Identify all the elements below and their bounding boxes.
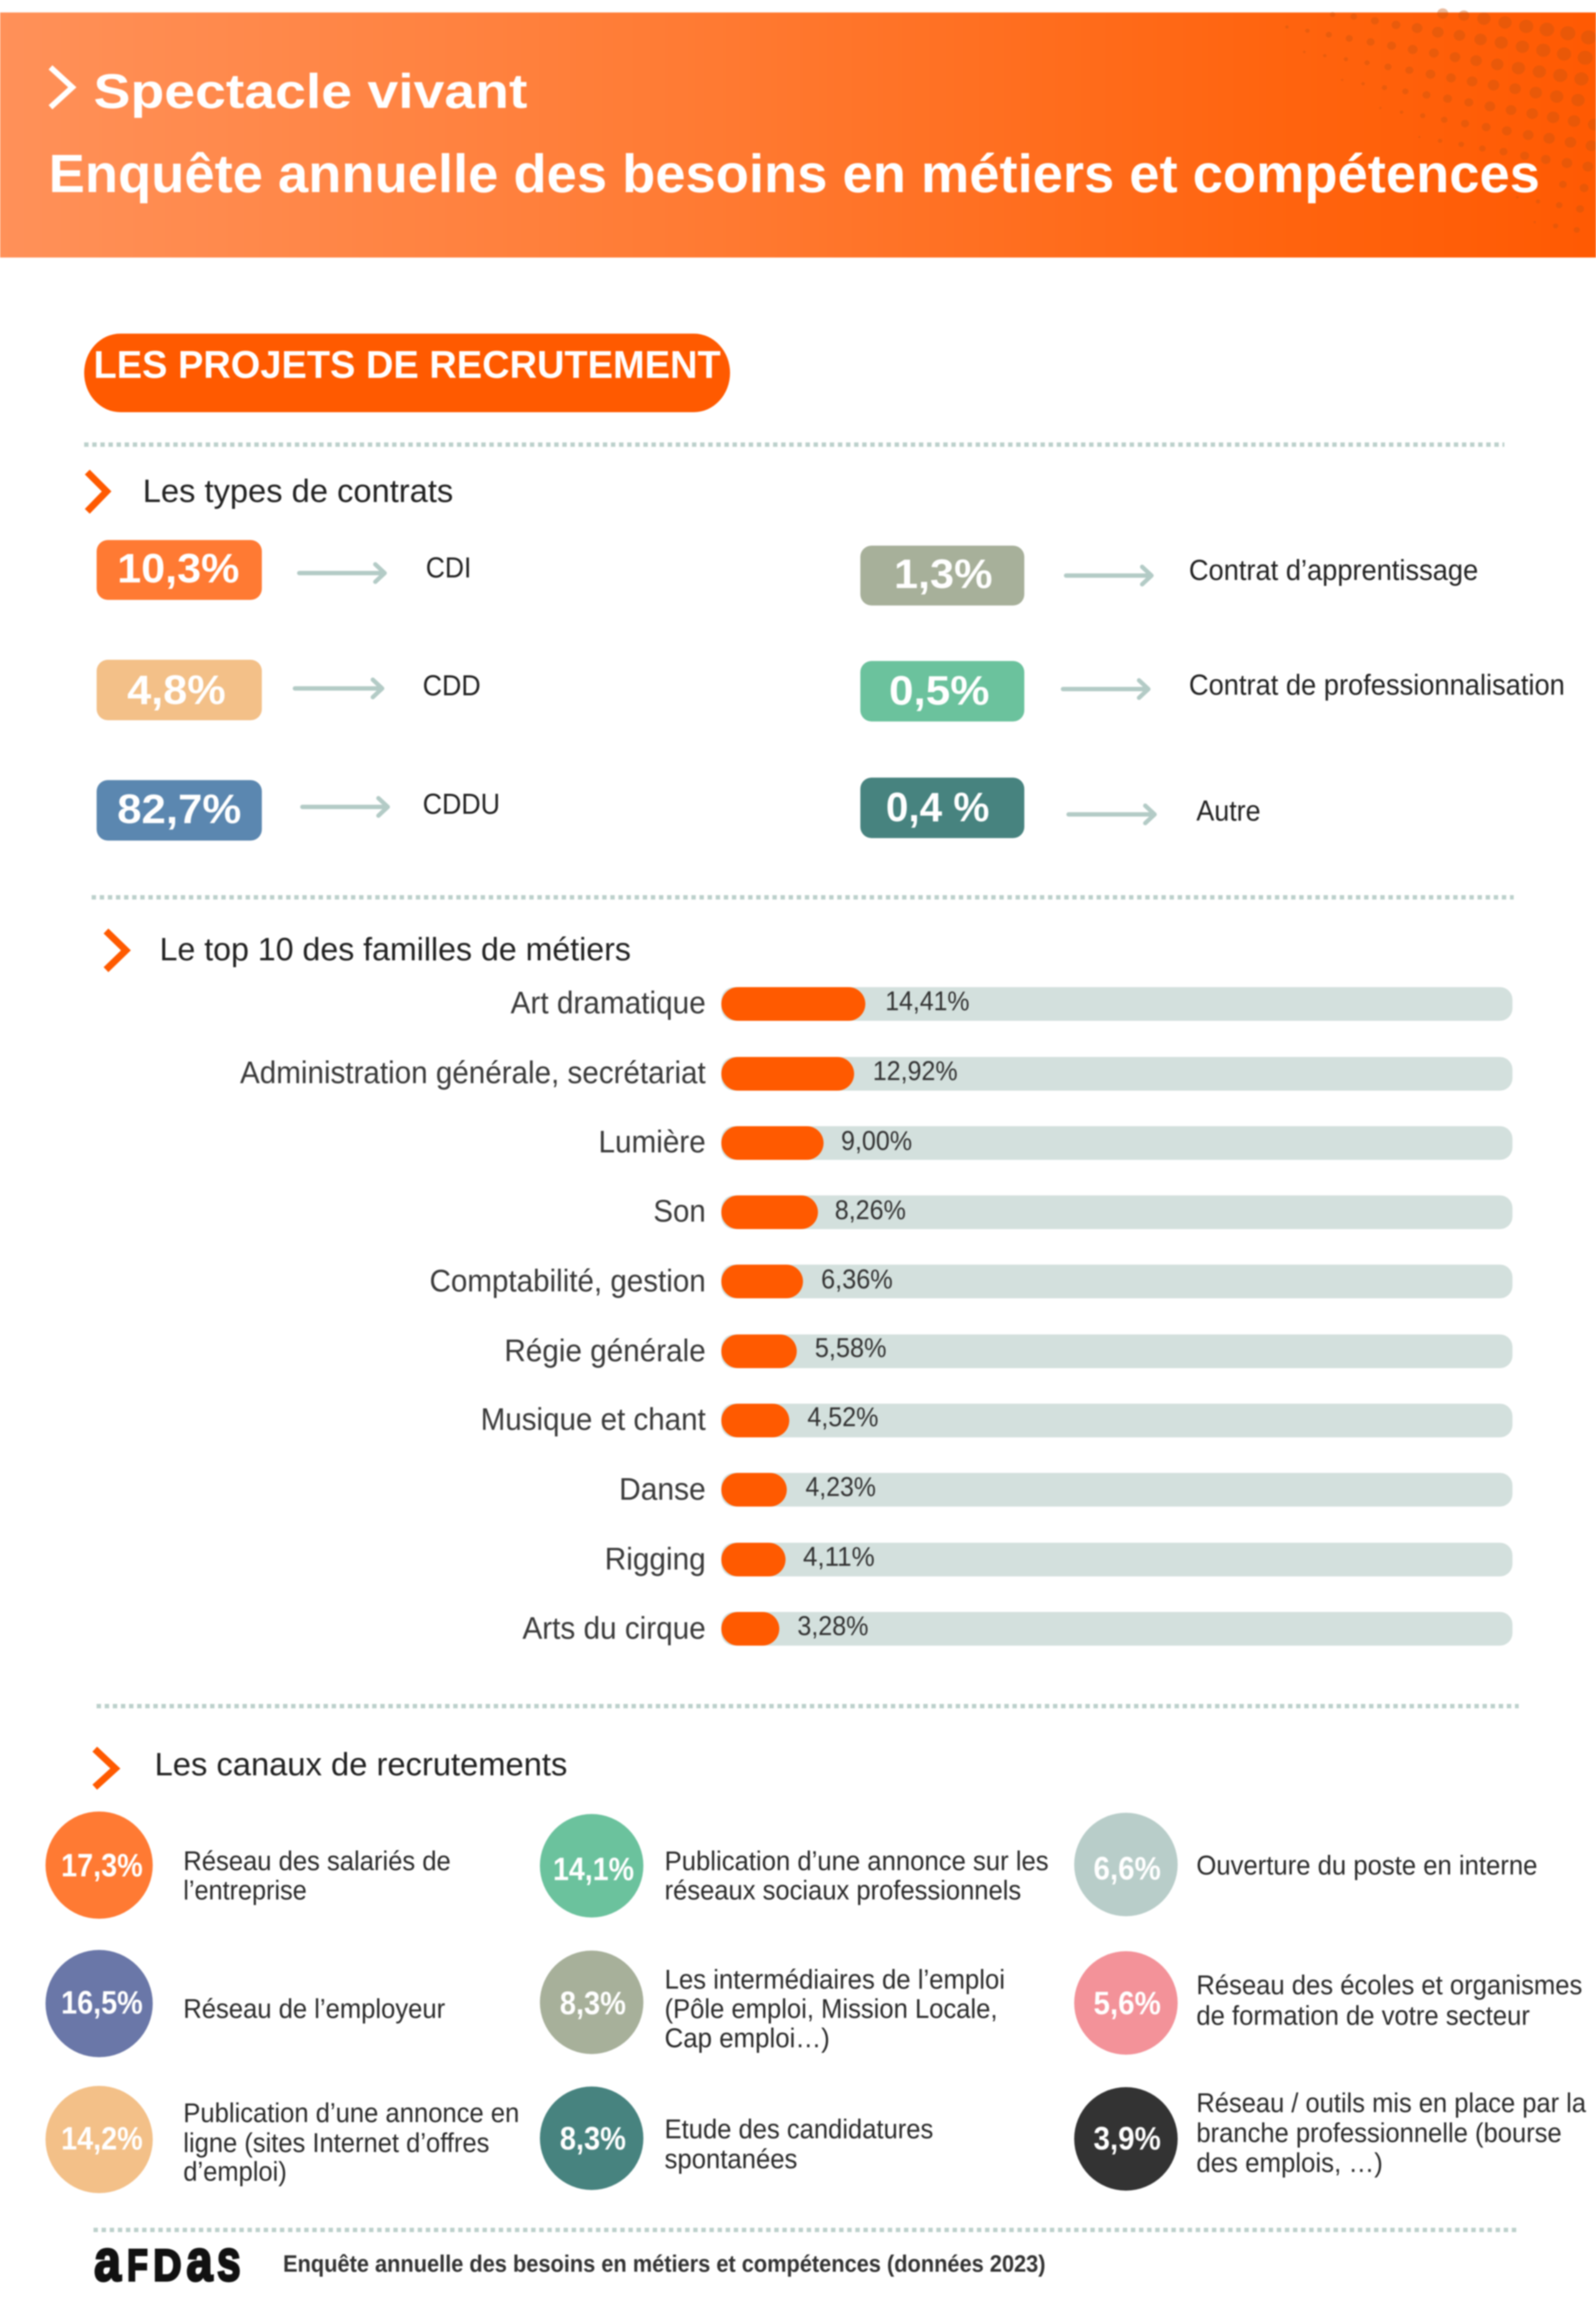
heading: types de contrats: Les types de contrats xyxy=(143,473,453,509)
channel: employeur: Réseau de l’employeur xyxy=(183,1994,445,2024)
contract: professionnalisation: 0,5% xyxy=(889,667,989,713)
channel: écoles: de formation de votre secteur xyxy=(1196,2000,1530,2031)
contract: CDDU: 82,7% xyxy=(117,786,241,832)
contract: CDD xyxy=(97,660,481,720)
channel: poste en interne: Ouverture du poste en interne xyxy=(1196,1850,1537,1881)
bar: Musique et chant: 4,52% xyxy=(807,1402,878,1432)
bar: Comptabilité xyxy=(430,1263,1512,1298)
bar: Régie générale xyxy=(504,1333,1512,1368)
channel: candidatures spontanées: spontanées xyxy=(665,2144,797,2174)
contract: apprentissage xyxy=(860,546,1478,605)
bar: Administration: 12,92% xyxy=(873,1056,958,1086)
bar: Art dramatique: 14,41% xyxy=(885,986,969,1016)
panel: recruitment channels xyxy=(46,1812,1586,2193)
channel: réseaux sociaux: 14,1% xyxy=(553,1851,634,1888)
bar: Art dramatique: Art dramatique xyxy=(511,985,706,1020)
bar: Danse xyxy=(619,1472,1512,1507)
contract: professionnalisation xyxy=(860,661,1565,721)
channel: réseaux sociaux xyxy=(540,1814,1049,1918)
bar: Arts du cirque: Arts du cirque xyxy=(522,1611,706,1646)
contract: CDDU: CDDU xyxy=(423,788,500,820)
channel: branche professionnelle xyxy=(1074,2087,1586,2191)
bar: Régie générale: Régie générale xyxy=(504,1333,706,1368)
channel: employeur xyxy=(46,1950,445,2057)
channel: intermédiaires xyxy=(540,1951,1005,2054)
bar: Danse: Danse xyxy=(619,1472,706,1507)
decorative halftone dots xyxy=(1285,8,1596,233)
bar: Régie générale: 5,58% xyxy=(815,1333,887,1363)
section pill: les projets de recrutement xyxy=(84,334,730,412)
contract: CDI: CDI xyxy=(426,551,471,584)
contract: apprentissage: Contrat d’apprentissage xyxy=(1189,554,1478,586)
section pill: les projets de recrutement: LES PROJETS DE RECRUTEMENT xyxy=(94,344,721,387)
bar: Comptabilité: Comptabilité, gestion xyxy=(430,1263,706,1298)
channel: annonce en ligne: Publication d’une annonce en xyxy=(183,2098,519,2128)
contract: CDD: CDD xyxy=(423,669,481,702)
panel: contract types xyxy=(97,540,1565,841)
bar: Arts du cirque: 3,28% xyxy=(797,1611,868,1641)
channel: annonce en ligne: 14,2% xyxy=(61,2121,143,2157)
bar: Comptabilité: 6,36% xyxy=(821,1264,893,1295)
channel: réseaux sociaux: Publication d’une annonce sur les xyxy=(665,1846,1049,1876)
channel: salariés: 17,3% xyxy=(61,1848,143,1884)
channel: branche professionnelle: branche professionnelle (bourse xyxy=(1196,2118,1562,2148)
logo: afdas: a xyxy=(186,2227,213,2293)
bar: Art dramatique xyxy=(511,985,1512,1021)
bar: Rigging: Rigging xyxy=(605,1541,706,1576)
logo: afdas: s xyxy=(217,2227,241,2293)
channel: intermédiaires: (Pôle emploi, Mission Locale, xyxy=(665,1994,998,2024)
bar chart: top 10 job families xyxy=(240,985,1512,1646)
logo: afdas: D xyxy=(153,2241,181,2290)
channel: salariés xyxy=(46,1812,451,1919)
channel: salariés: l’entreprise xyxy=(183,1875,307,1906)
header banner xyxy=(0,8,1596,258)
contract: autre xyxy=(860,778,1261,838)
bar: Musique et chant xyxy=(481,1402,1512,1437)
channel: branche professionnelle: 3,9% xyxy=(1094,2121,1161,2157)
channel: annonce en ligne: d’emploi) xyxy=(183,2156,287,2187)
contract: autre: 0,4 % xyxy=(886,784,989,830)
bar: Lumière: 9,00% xyxy=(841,1126,912,1156)
contract: CDI: 10,3% xyxy=(117,545,239,591)
contract: CDDU xyxy=(97,780,500,841)
contract: autre: Autre xyxy=(1196,794,1261,827)
channel: employeur: 16,5% xyxy=(61,1985,143,2021)
bar: Rigging xyxy=(605,1541,1512,1576)
channel: poste en interne xyxy=(1074,1813,1537,1916)
bar: Son xyxy=(653,1194,1512,1229)
channel: candidatures spontanées: 8,3% xyxy=(560,2121,626,2157)
bar: Administration: Administration générale, secrétariat xyxy=(240,1055,706,1090)
channel: candidatures spontanées: Etude des candidatures xyxy=(665,2114,933,2144)
contract: apprentissage: 1,3% xyxy=(894,551,993,597)
bar: Rigging: 4,11% xyxy=(803,1541,875,1572)
channel: réseaux sociaux: réseaux sociaux professionnels xyxy=(665,1875,1021,1906)
bar: Son: Son xyxy=(653,1194,706,1228)
channel: écoles xyxy=(1074,1951,1582,2055)
channel: annonce en ligne xyxy=(46,2086,519,2193)
contract: CDI xyxy=(97,540,471,600)
channel: écoles: 5,6% xyxy=(1094,1985,1161,2022)
logo: afdas: F xyxy=(127,2241,148,2290)
footer xyxy=(94,2227,1046,2293)
bar: Musique et chant: Musique et chant xyxy=(481,1402,706,1437)
channel: intermédiaires: 8,3% xyxy=(560,1985,626,2022)
bar: Son: 8,26% xyxy=(835,1195,906,1225)
subtitle: Spectacle vivant xyxy=(94,64,527,118)
bar: Lumière: Lumière xyxy=(598,1124,706,1159)
heading: canaux de recrutements: Les canaux de recrutements xyxy=(155,1747,567,1783)
channel: intermédiaires: Cap emploi…) xyxy=(665,2023,830,2053)
channel: candidatures spontanées xyxy=(540,2086,933,2190)
bar: Lumière xyxy=(598,1124,1512,1160)
channel: branche professionnelle: des emplois, …) xyxy=(1196,2148,1383,2178)
contract: CDD: 4,8% xyxy=(127,667,226,713)
heading: top 10: Le top 10 des familles de métiers xyxy=(160,932,631,968)
channel: intermédiaires: Les intermédiaires de l’emploi xyxy=(665,1964,1005,1995)
logo: afdas: a xyxy=(94,2227,122,2293)
icon: white chevron xyxy=(50,67,72,107)
bar: Administration xyxy=(240,1055,1512,1091)
channel: annonce en ligne: ligne (sites Internet d’offres xyxy=(183,2128,489,2158)
contract: professionnalisation: Contrat de professionnalisation xyxy=(1189,668,1565,701)
channel: salariés: Réseau des salariés de xyxy=(183,1846,451,1876)
footer source text: Enquête annuelle des besoins en métiers et compétences (données 2023) xyxy=(283,2251,1046,2277)
bar: Danse: 4,23% xyxy=(805,1472,876,1502)
title: Enquête annuelle des besoins en métiers et compétences xyxy=(49,144,1540,204)
channel: poste en interne: 6,6% xyxy=(1094,1851,1161,1887)
bar: Arts du cirque xyxy=(522,1611,1512,1646)
